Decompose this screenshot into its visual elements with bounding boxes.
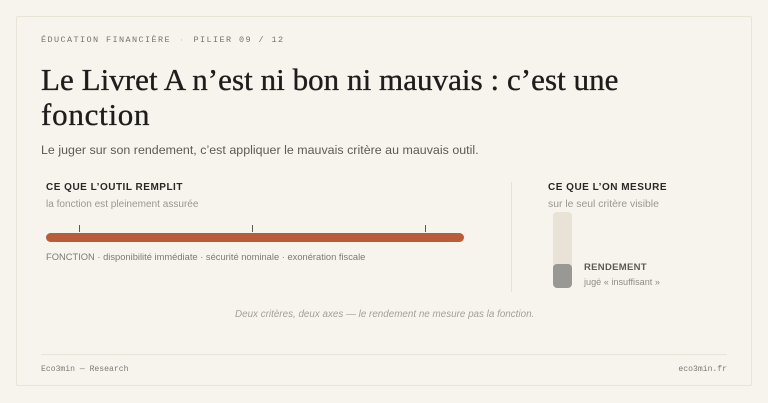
function caption: FONCTION · disponibilité immédiate · sécurité nominale · exonération fiscale (46, 252, 365, 262)
footer left: Eco3min — Research (41, 365, 128, 374)
title (41, 62, 618, 132)
divider (511, 182, 512, 292)
title: Le Livret A n’est ni bon ni mauvais : c’est une (41, 62, 618, 97)
measure subheading: sur le seul critère visible (548, 199, 659, 210)
measure heading: CE QUE L’ON MESURE (548, 182, 667, 193)
note: Deux critères, deux axes — le rendement ne mesure pas la fonction. (235, 309, 534, 320)
panel: function (46, 182, 464, 262)
function heading: CE QUE L’OUTIL REMPLIT (46, 182, 183, 193)
function subheading: la fonction est pleinement assurée (46, 199, 198, 210)
title: fonction (41, 97, 150, 132)
gauge label (584, 262, 660, 287)
eyebrow: ÉDUCATION FINANCIÈRE · PILIER 09 / 12 (41, 35, 285, 45)
vertical gauge (553, 212, 572, 288)
footer rule and text (41, 354, 727, 376)
panel: measure (548, 182, 667, 288)
gauge label: RENDEMENT (584, 262, 647, 273)
footer right: eco3min.fr (678, 365, 727, 374)
subtitle: Le juger sur son rendement, c’est appliquer le mauvais critère au mauvais outil. (41, 143, 479, 157)
function bar with ticks (46, 225, 464, 242)
gauge label: jugé « insuffisant » (584, 277, 660, 287)
